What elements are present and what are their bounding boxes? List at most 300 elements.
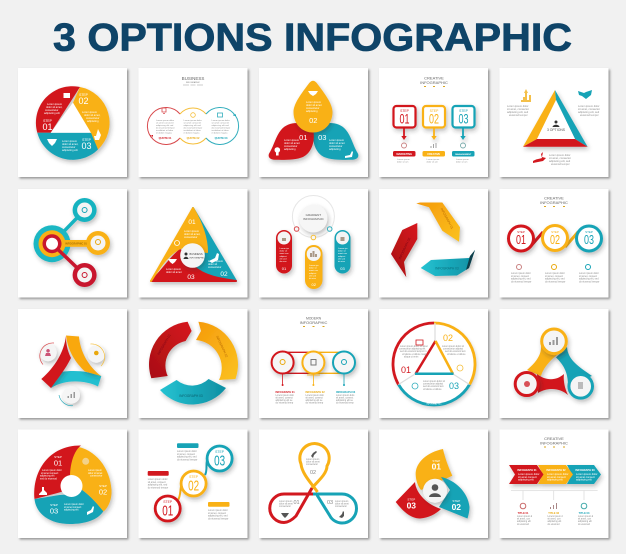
node icons: [82, 208, 100, 278]
pill text: amet con: [338, 252, 348, 255]
petal labels: STEP: [452, 499, 460, 503]
petal labels: 02: [452, 502, 461, 512]
pill text: adipisci: [338, 256, 346, 258]
captions: Lorem ipsum d: [517, 515, 533, 518]
heading: INFOGRAPHIC: [540, 440, 568, 446]
captions: TITLE 02: [548, 511, 560, 515]
text and icons: Lorem ipsum: [166, 267, 181, 271]
text and icons: Lorem ipsum: [208, 259, 223, 263]
body text: consectetur: [90, 475, 103, 478]
column text: sit amet, consect: [336, 396, 354, 400]
teal petal: [439, 477, 470, 518]
captions: do eiusmod tempor: [511, 280, 532, 283]
icons: [47, 93, 101, 146]
captions: [517, 511, 594, 526]
orange ribbon: INFOGRAPH 01: [440, 207, 454, 230]
chevron text: sit amet consect: [547, 475, 566, 479]
teal ring: [569, 374, 592, 398]
icons: [520, 503, 587, 509]
pill text: dolor sit: [309, 267, 317, 270]
column text: adipiscing elit se: [306, 399, 323, 402]
pill text: dolor sit: [338, 250, 346, 253]
loop text: dolor sit amet: [279, 503, 293, 506]
wave text: incididunt ut labor: [212, 129, 229, 132]
panel: swirl triangle: [138, 189, 248, 298]
labels: STEP: [54, 455, 62, 459]
column text: INFOGRAPH 03: [336, 390, 356, 394]
captions: do eiusmod: [517, 524, 530, 526]
numbers: [187, 219, 228, 281]
captions: Lorem ipsum: [456, 158, 469, 161]
node left: [39, 343, 57, 364]
column text: adipiscing elit se: [276, 399, 293, 402]
teal segment: INFOGRAPH 03: [179, 394, 203, 398]
wave text: Lorem ipsum dolor: [212, 119, 230, 122]
pill text: adipisci: [309, 273, 317, 275]
panel: three loops: [259, 430, 368, 538]
step labels: STEP: [82, 138, 92, 142]
heading: MODERN: [306, 316, 322, 320]
panel: business quote wave: [138, 68, 248, 177]
heading: INFOGRAPHIC: [420, 80, 448, 85]
text blocks: Lorem ipsum dolor sit: [442, 345, 464, 348]
column text: [276, 390, 356, 404]
petal labels: 03: [407, 500, 416, 510]
red sign: STEP: [400, 109, 410, 113]
circle: [393, 323, 475, 405]
pill text: do eius: [280, 261, 287, 263]
pill text: adipisci: [280, 256, 287, 258]
wave icons: [162, 108, 222, 117]
pill text: elit sed: [309, 274, 317, 277]
drop labels: consectetur: [329, 144, 343, 148]
step labels: STEP: [43, 119, 53, 123]
body text: Lorem ipsum dolor: [64, 503, 84, 506]
text blocks: Lorem ipsum dolor sit: [423, 380, 445, 383]
labels: Lorem ipsum dolor: [148, 478, 168, 481]
labels: adipiscing elit, sed: [208, 515, 228, 518]
separators: [398, 323, 470, 384]
panel: step signposts: [379, 68, 488, 177]
wave text: do eiusmod tempor: [212, 126, 230, 130]
pill text: elit sed: [338, 257, 346, 260]
wave text: Lorem ipsum dolor: [156, 119, 174, 122]
column text: sit amet, consect: [306, 396, 323, 400]
panel: twisted ribbon triangle: [18, 309, 127, 418]
text blocks: [399, 345, 466, 406]
drop labels: adipiscing: [329, 147, 341, 151]
numbers: [401, 333, 459, 391]
pill text: Lorem ips: [280, 247, 290, 250]
chart: three segment circle: [36, 86, 110, 160]
teal pill: 03: [340, 266, 345, 271]
captions: sit amet, consect: [545, 275, 563, 278]
wave text: [150, 114, 236, 142]
captions: adipiscing elit, sed: [549, 159, 571, 163]
orange ribbon: [66, 336, 101, 376]
center circle: INFOGRAPHIC: [190, 256, 205, 260]
wave text: sit amet consectet: [212, 122, 230, 124]
teal blob: [313, 123, 358, 160]
text blocks: consectetur adipiscing elit: [399, 348, 426, 351]
yellow segment: INFOGRAPH 02: [215, 335, 229, 358]
panel: chevron process: [500, 430, 608, 538]
loop text: consectetur: [306, 463, 318, 466]
text blocks: Lorem ipsum dolor sit amet: [400, 345, 428, 348]
wave text: QUOTE 02: [187, 136, 200, 140]
loop text: dolor sit amet: [306, 461, 320, 464]
text blocks: sed do eiusmod tem: [445, 350, 466, 353]
heading: [540, 196, 568, 206]
captions: dolor sit am: [426, 160, 438, 164]
labels: Lorem ipsum dolor: [208, 509, 228, 512]
panel: ring of arrows: [138, 309, 248, 418]
red ribbon: [41, 336, 71, 388]
chevron text: Lorem ipsum dolor: [576, 472, 598, 476]
center circle: BUSINESS: [190, 252, 203, 256]
captions: Lorem ipsum: [397, 158, 410, 161]
captions: do eiusmod tempor: [545, 280, 566, 283]
bar label: INFOGRAPHIC 01: [65, 242, 87, 246]
avatar: [423, 479, 447, 503]
captions: sit amet, con: [548, 518, 561, 521]
drop labels: consectetur: [284, 144, 298, 148]
wave text: incididunt ut labor: [184, 129, 201, 132]
loop text: Lorem ipsum: [306, 458, 319, 461]
captions: TITLE 03: [579, 511, 590, 515]
chevron text: adipiscing elit: [518, 478, 534, 482]
pills: MARKETING: [396, 152, 412, 156]
labels: 03: [50, 506, 58, 516]
labels: STEP: [99, 484, 107, 488]
ring text: 02: [550, 232, 560, 247]
panel: modern chain: [259, 309, 368, 418]
wave text: QUOTE 03: [215, 136, 228, 140]
wave text: adipiscing elit sed: [156, 124, 174, 127]
step labels: 02: [78, 96, 89, 106]
wave text: “: [233, 114, 236, 121]
body text: sed do eiusmod: [40, 477, 58, 480]
captions: Lorem ipsum d: [578, 515, 594, 518]
chevron text: INFOGRAPH 02: [546, 468, 566, 472]
loop text: 03: [327, 500, 333, 506]
icons: [412, 340, 463, 389]
rings: [272, 352, 355, 374]
yellow sign: [423, 106, 445, 140]
center circle: [180, 243, 205, 268]
numbers: 01: [401, 365, 411, 375]
labels: [148, 443, 230, 520]
ring arcs: [393, 323, 475, 405]
heading: BUSINESS: [182, 76, 204, 81]
ring text: 01: [516, 232, 526, 247]
heading: [420, 76, 448, 86]
captions: eiusmod tempor: [580, 113, 599, 117]
labels: STEP: [50, 503, 58, 507]
yellow loop: [300, 444, 329, 492]
sphere heading: GRADIENT: [306, 213, 321, 217]
pills: CREATIVE: [427, 152, 440, 156]
segment text: adipiscing elit: [62, 148, 78, 152]
captions: sit amet, consectet: [578, 107, 600, 111]
body text: [40, 469, 103, 512]
chevron text: sit amet consect: [518, 475, 537, 479]
inner triangle: [415, 341, 454, 374]
swirl: [34, 445, 112, 524]
segment text: consectetur: [45, 108, 59, 112]
connector dots: [294, 227, 332, 240]
captions: adipiscing elit: [578, 520, 592, 523]
pill text: do eius: [338, 261, 346, 263]
labels: 01: [54, 458, 62, 468]
labels: sit amet, consect: [177, 453, 195, 456]
yellow petal: [416, 449, 452, 490]
segment text: dolor sit amet,: [62, 142, 79, 146]
wave text: et dolore magna: [156, 132, 173, 134]
segment text: Lorem ipsum: [62, 139, 77, 143]
text blocks: INFOGRAPHIC: [426, 402, 442, 406]
wave text: QUOTE 01: [159, 136, 172, 140]
labels: adipiscing elit, sed: [148, 484, 168, 487]
captions: dolor sit am: [397, 160, 408, 164]
captions: Lorem ipsum d: [548, 515, 563, 518]
node right: [88, 344, 105, 366]
step labels: 01: [42, 122, 53, 132]
segment text: adipiscing elit: [44, 111, 60, 115]
text blocks: ut labore et dolore: [423, 388, 442, 391]
column text: do eiusmod temp: [336, 402, 354, 404]
labels: do eiusmod tempor: [177, 458, 198, 461]
drop labels: adipiscing: [306, 109, 318, 113]
chevron text: [517, 468, 598, 482]
text and icons: [166, 229, 223, 274]
captions: Lorem ipsum dolor: [511, 272, 531, 275]
wave text: sit amet consectet: [184, 122, 202, 124]
wave text: Lorem ipsum dolor: [184, 119, 202, 122]
captions: do eiusmod: [578, 524, 591, 526]
labels: sit amet, consect: [208, 512, 226, 515]
node centers: [77, 202, 106, 282]
segment text: dolor sit amet,: [84, 113, 101, 117]
icons: [516, 264, 590, 270]
pill text: dolor sit: [280, 250, 288, 253]
panel: ring with inner triangle: [379, 309, 488, 418]
text blocks: aliqua ut enim: [404, 355, 418, 358]
heading: [540, 436, 568, 447]
text and icons: dolor sit amet,: [184, 232, 201, 236]
teal ribbon: [51, 371, 101, 388]
captions: [397, 158, 469, 164]
text blocks: sed do eiusmod tempor in: [400, 350, 427, 353]
body text: adipiscing elit: [40, 475, 55, 478]
text and icons: consectetur: [184, 235, 198, 239]
chevron text: sit amet consect: [576, 475, 595, 479]
numbers: 01: [188, 219, 196, 226]
timeline: [511, 490, 598, 500]
text and icons: consectetur: [208, 265, 222, 269]
heading: INFOGRAPHIC: [540, 200, 568, 205]
column text: adipiscing elit se: [336, 399, 354, 402]
numbers: 02: [443, 333, 453, 343]
drop labels: 03: [318, 133, 326, 142]
red blob: [269, 123, 314, 160]
segment text: dolor sit amet,: [46, 105, 63, 109]
title: 3 OPTIONS INFOGRAPHIC: [53, 16, 572, 60]
petal labels: 01: [432, 462, 441, 472]
heading: INFOGRAPHIC: [300, 320, 328, 325]
ring text: STEP: [585, 230, 593, 234]
body text: adipiscing elit: [64, 509, 79, 512]
step text: 01: [162, 502, 173, 520]
column text: sit amet, consect: [276, 396, 293, 400]
drop labels: dolor sit amet: [306, 103, 322, 107]
teal ribbon: INFOGRAPH 03: [435, 266, 459, 270]
petal labels: STEP: [432, 459, 440, 463]
step labels: STEP: [79, 93, 89, 97]
chevron text: INFOGRAPH 01: [517, 468, 537, 472]
captions: Lorem ipsum dolor: [579, 272, 599, 275]
petal labels: STEP: [407, 498, 415, 502]
chevrons: [509, 465, 601, 484]
numbers: 03: [187, 274, 195, 281]
yellow sign: STEP: [430, 109, 439, 113]
teal sign: STEP: [459, 109, 469, 113]
chevron text: adipiscing elit: [576, 478, 592, 482]
drop labels: dolor sit amet: [329, 141, 345, 145]
captions: sit amet, consect: [579, 275, 597, 278]
body text: Lorem ipsum dolor: [42, 469, 62, 472]
captions: Lorem ipsum dolor: [545, 272, 565, 275]
teal loop: [313, 494, 356, 523]
numbers: 02: [220, 271, 228, 278]
chevron text: INFOGRAPH 03: [575, 468, 595, 472]
loop text: 01: [293, 500, 300, 506]
chevron text: Lorem ipsum dolor: [547, 472, 569, 476]
yellow sign: 02: [429, 110, 439, 126]
body text: Lorem ipsum: [88, 469, 102, 472]
drop labels: 01: [299, 133, 307, 142]
panel: three ribbon arrows: [379, 189, 488, 298]
connectors: [178, 458, 208, 500]
column text: Lorem ipsum dolo: [276, 394, 294, 397]
captions: Lorem ipsum: [426, 158, 439, 161]
column text: INFOGRAPH 02: [306, 390, 325, 394]
wave text: incididunt ut labor: [156, 129, 173, 132]
red sign: [394, 106, 416, 140]
numbers: 03: [449, 381, 459, 391]
step text: 02: [188, 478, 199, 494]
text blocks: ut labore et dolore magn: [402, 353, 428, 356]
sphere heading: [303, 213, 325, 221]
loop text: Lorem ipsum: [279, 500, 292, 503]
teal sign: 03: [458, 110, 469, 126]
captions: do eiusmod tempor: [579, 280, 600, 283]
captions: adipiscing elit, sed: [578, 110, 600, 114]
panel: three linked rings: [500, 309, 608, 418]
panel: swirl donut: [18, 430, 127, 538]
ring text: [516, 230, 594, 247]
captions: Lorem ipsum dolor: [507, 104, 529, 108]
captions: sit amet, consectet: [549, 156, 571, 160]
loop text: [279, 458, 349, 508]
small icons: [402, 143, 466, 148]
petal labels: [407, 459, 461, 512]
panel: hub with three nodes: [18, 189, 127, 298]
captions: Lorem ipsum dolor: [578, 104, 600, 108]
heading: CREATIVE: [544, 196, 564, 200]
red loop: [270, 488, 313, 522]
connectors: [530, 232, 578, 247]
column text: INFOGRAPH 01: [276, 390, 295, 394]
segment text: adipiscing: [87, 119, 99, 123]
pill text: elit sed: [280, 257, 287, 260]
step labels: [42, 93, 92, 151]
loop icons: [281, 451, 344, 518]
drop lines: [282, 374, 345, 386]
captions: sit amet, con: [578, 518, 592, 521]
loop text: consectetur: [335, 505, 347, 508]
icons: [521, 89, 592, 163]
chevron text: Lorem ipsum dolor: [518, 472, 540, 476]
heading: [182, 76, 204, 85]
captions: dolor sit am: [456, 160, 467, 164]
drop labels: [284, 100, 345, 151]
sphere heading: INFOGRAPHIC: [303, 217, 325, 221]
red link: [537, 374, 568, 395]
chevron text: adipiscing elit: [547, 478, 563, 482]
captions: sit amet, consect: [511, 275, 529, 278]
wave text: do eiusmod tempor: [156, 126, 175, 130]
column text: Lorem ipsum dolo: [306, 394, 324, 397]
wave text: adipiscing elit sed: [184, 124, 202, 127]
heading: CREATIVE: [424, 76, 444, 80]
pills: [393, 151, 474, 156]
labels: do eiusmod tempor: [208, 517, 229, 520]
wave outline: [147, 108, 239, 144]
red pill: 01: [282, 266, 287, 271]
yellow link: [527, 345, 566, 376]
drop icons: [274, 91, 353, 158]
step text: STEP: [163, 500, 173, 504]
column text: do eiusmod temp: [276, 402, 294, 404]
drop labels: dolor sit amet: [284, 141, 300, 145]
captions: do eiusmod: [548, 524, 560, 526]
captions: adipiscing elit, sed: [511, 278, 531, 281]
body text: sit amet consect: [64, 506, 82, 509]
wave text: adipiscing elit sed: [212, 124, 230, 127]
captions: adipiscing elit: [548, 520, 562, 523]
panel: three drops: [259, 68, 368, 177]
loop text: consectetur: [279, 505, 291, 508]
text blocks: consectetur adipisci: [423, 383, 444, 386]
panel: creative step rings: [500, 189, 608, 298]
captions: adipiscing elit, sed: [579, 278, 599, 281]
ring text: 03: [584, 232, 594, 247]
text blocks: consectetur adipisci: [443, 348, 464, 351]
red petal: [396, 482, 441, 518]
center sphere: [299, 204, 327, 232]
panel: pinwheel with avatar: [379, 430, 488, 538]
yellow pill: 02: [311, 282, 317, 287]
pill text: amet con: [280, 252, 289, 255]
text and icons: dolor sit: [208, 262, 217, 266]
drop labels: consectetur: [306, 106, 320, 110]
panel: gradient pills: [259, 189, 368, 298]
step labels: 03: [81, 141, 92, 151]
teal sign: [452, 106, 474, 140]
drop labels: Lorem ipsum: [284, 138, 299, 142]
red segment: INFOGRAPH 01: [157, 333, 172, 356]
